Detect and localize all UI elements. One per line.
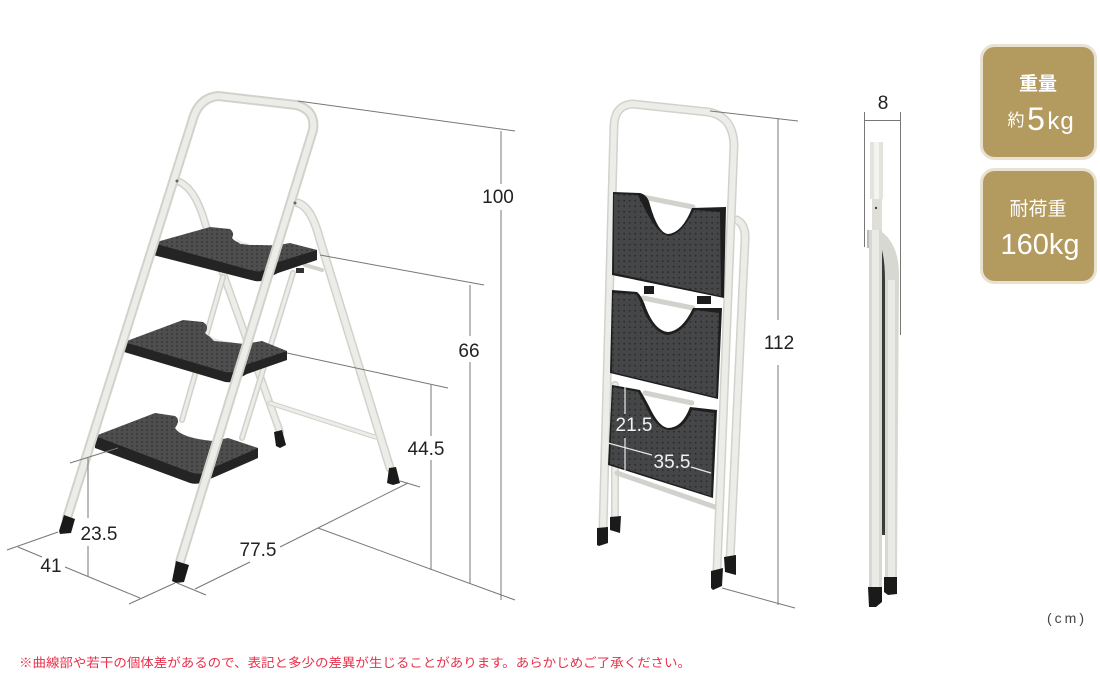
rubber feet [868, 577, 897, 607]
panel 2 [610, 290, 722, 399]
dimension labels: 100 [482, 187, 514, 208]
dimension labels: 23.5 [81, 524, 117, 545]
dimension labels: 112 [764, 333, 794, 354]
rear legs and braces [177, 181, 390, 468]
rubber feet [597, 516, 736, 590]
badge: weight [982, 46, 1096, 158]
dimension labels [40, 93, 888, 577]
panel 3 [608, 385, 717, 498]
step 3 [95, 413, 258, 484]
badge: load capacity: 160kg [1000, 229, 1080, 261]
badge: weight: 重量 [1019, 73, 1057, 95]
rear rail [615, 220, 745, 560]
front frame [67, 96, 313, 562]
rails [869, 230, 899, 588]
dimension labels: 41 [40, 556, 62, 577]
badge: load capacity [982, 170, 1096, 282]
badge: weight: 約 [1008, 111, 1024, 130]
ladder: folded side view [868, 142, 899, 607]
dimension labels: 77.5 [240, 540, 276, 561]
rubber feet [59, 430, 400, 583]
step dimension lines [608, 387, 711, 473]
front frame [603, 104, 734, 570]
panel 1 [612, 192, 726, 298]
dimension labels: 66 [458, 341, 480, 362]
badge: weight: kg [1047, 108, 1075, 135]
badge: load capacity: 耐荷重 [1009, 198, 1067, 220]
dimension labels: 21.5 [616, 415, 652, 436]
crossbars [617, 197, 715, 507]
dimension labels: 35.5 [654, 452, 690, 473]
hinges [644, 286, 711, 304]
badge: weight: 5 [1027, 101, 1045, 137]
step 1 [153, 227, 317, 281]
ladder: folded front view [597, 104, 745, 590]
step 2 [124, 320, 287, 382]
dimension labels: 8 [878, 93, 888, 114]
dimension labels: 44.5 [408, 439, 444, 460]
dimension lines [7, 101, 901, 608]
unit label: (cm) [1047, 610, 1087, 626]
centre gap [882, 245, 885, 535]
ladder: open three-quarter view [59, 96, 400, 583]
footnote: ※曲線部や若干の個体差があるので、表記と多少の差異が生じることがあります。あらかじめご了承ください。 [19, 655, 691, 670]
upper section [870, 142, 883, 235]
